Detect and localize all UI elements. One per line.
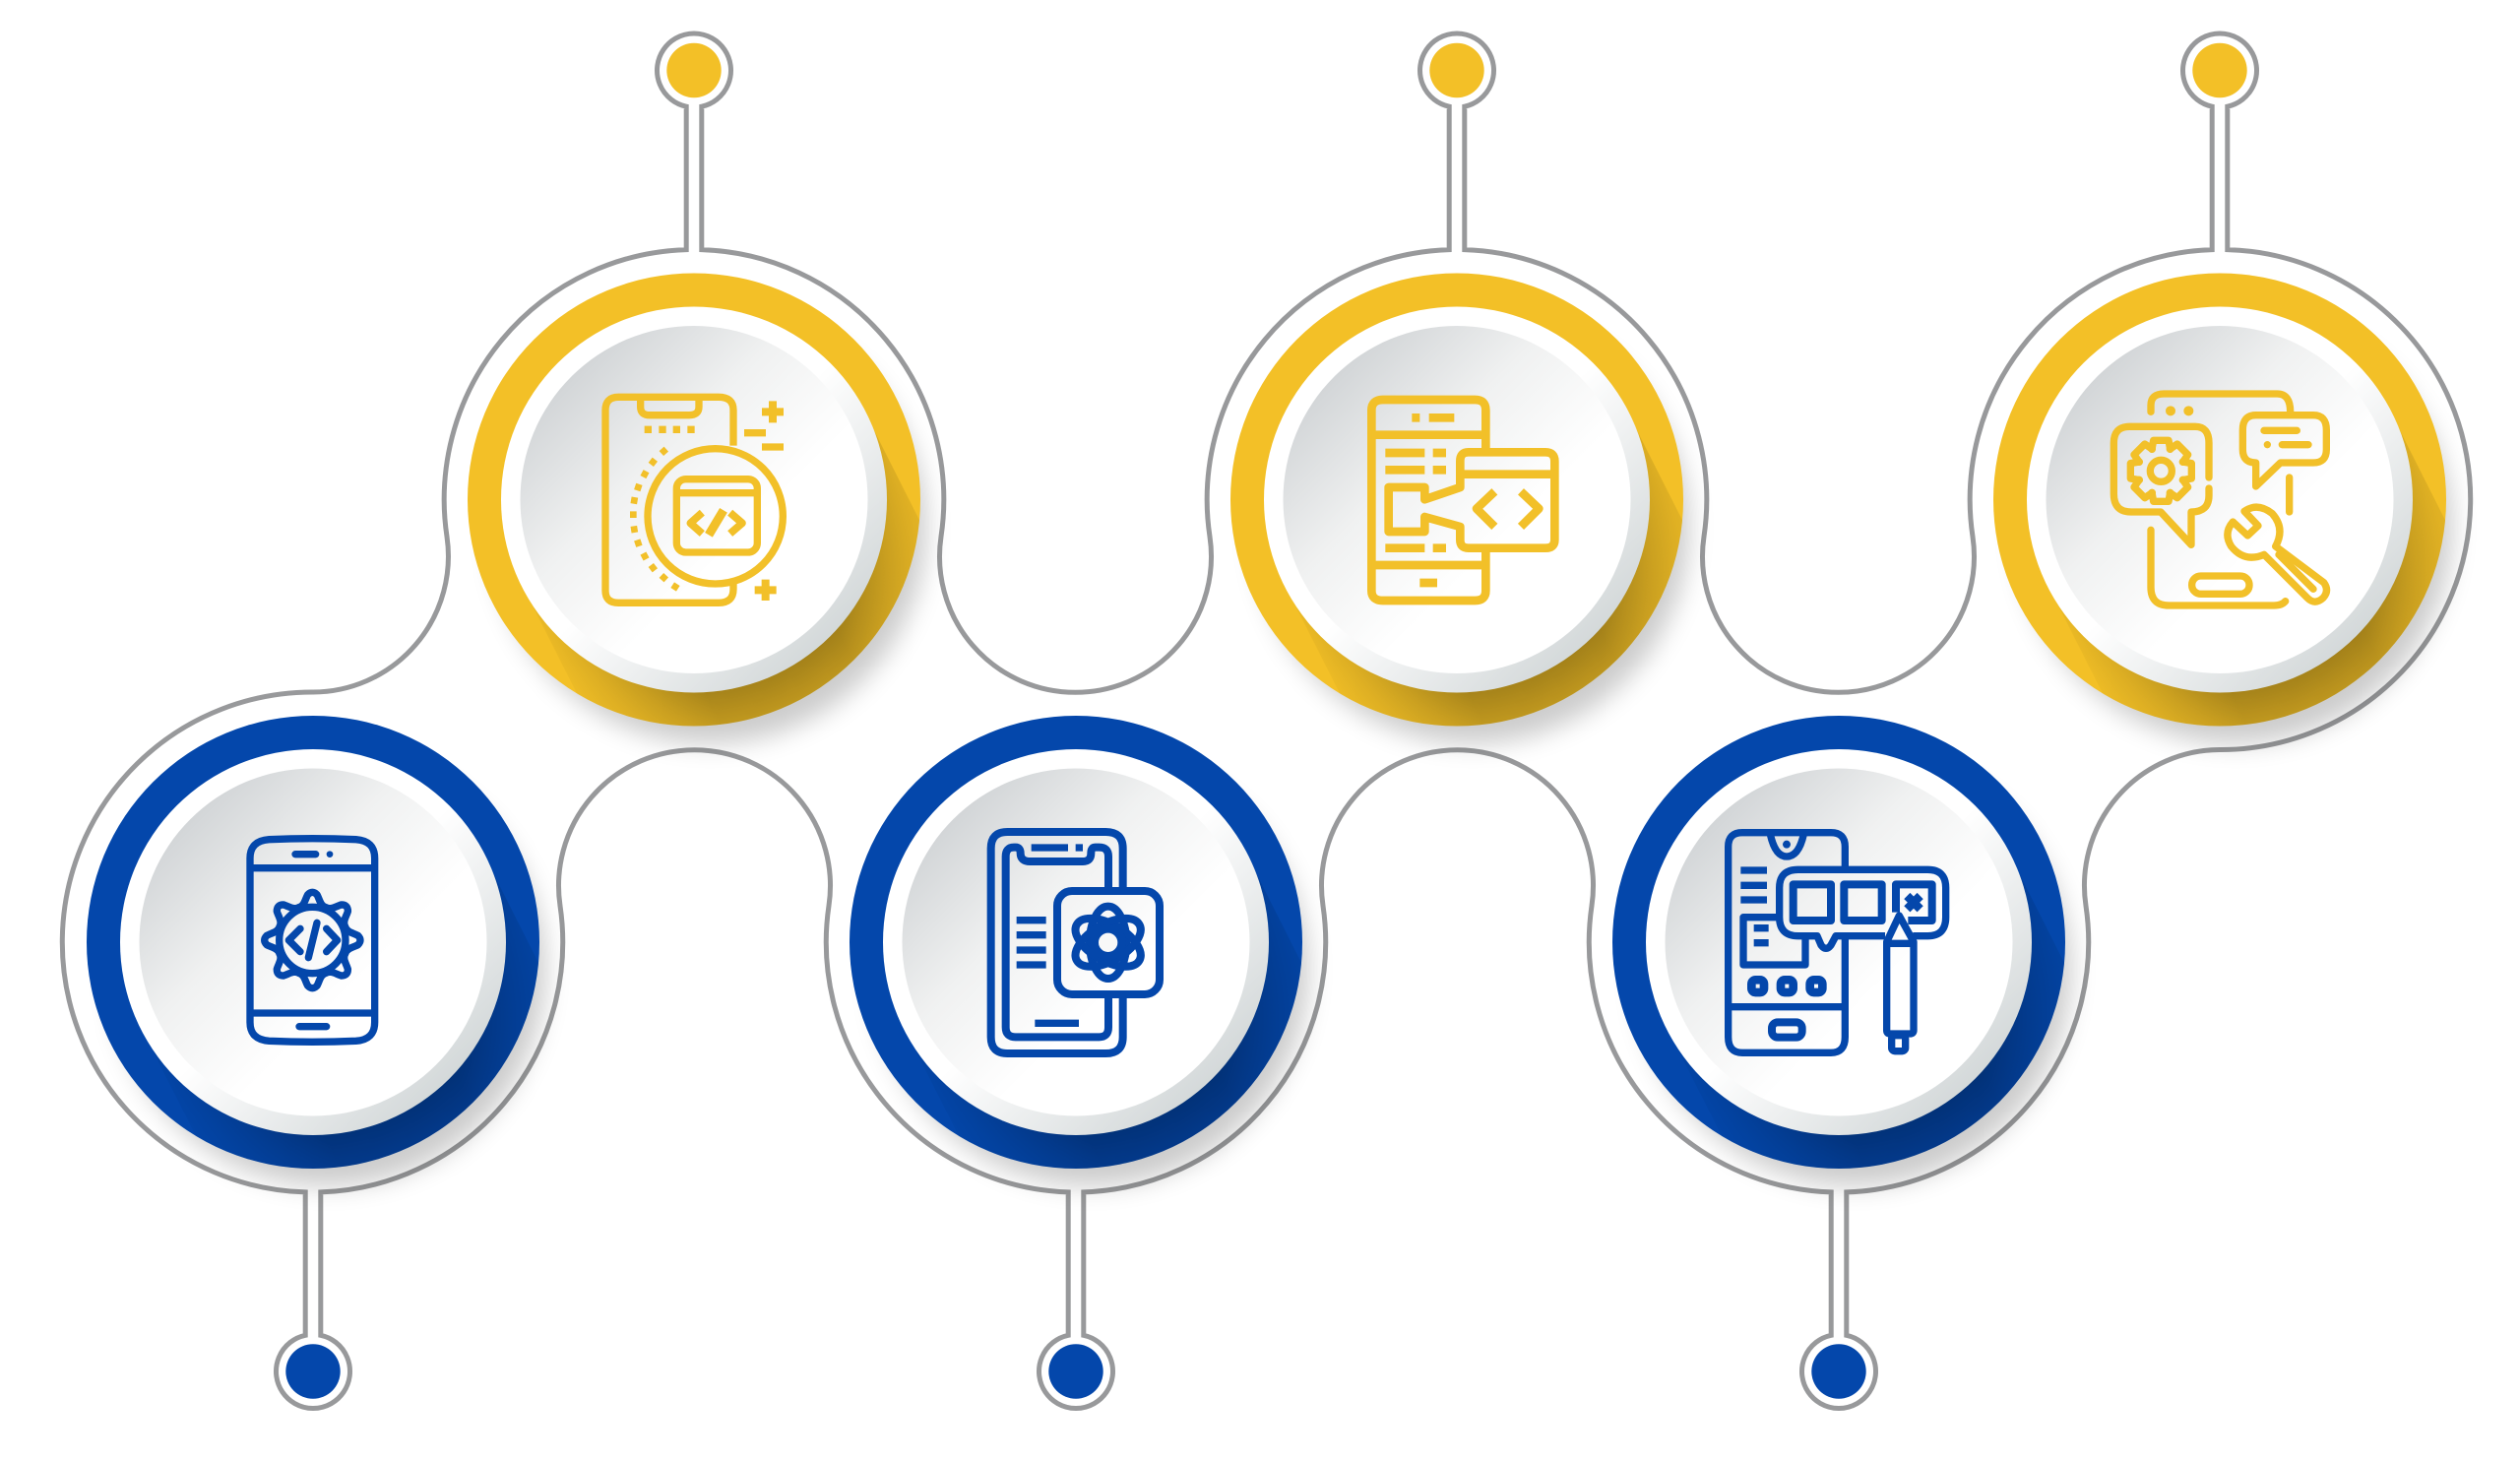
icon: phone with code window and pointer: [1371, 400, 1554, 601]
panel: blue disc 3: [1612, 716, 2083, 1197]
blue end dot 3: [1811, 1344, 1866, 1399]
panel: blue disc 1: [87, 716, 557, 1197]
icon: phone with code gear: [250, 839, 375, 1042]
panel: yellow disc 2: [1230, 274, 1701, 755]
yellow end dot 3: [2192, 43, 2247, 97]
yellow end dot 2: [1429, 43, 1484, 97]
icon: phone with code window magnifier: [605, 397, 784, 603]
blue end dot 2: [1048, 1344, 1103, 1399]
icon: phone with atom box: [991, 832, 1160, 1053]
icon: phone with layout bubble and pencil: [1729, 833, 1946, 1052]
yellow end dot 1: [666, 43, 722, 97]
panel: yellow disc 3: [1993, 274, 2463, 755]
panel: blue disc 2: [850, 716, 1319, 1197]
panel: yellow disc 1: [468, 274, 937, 755]
icon: phone with gear, chat bubble and wrench: [2113, 394, 2327, 605]
blue end dot 1: [285, 1344, 341, 1399]
